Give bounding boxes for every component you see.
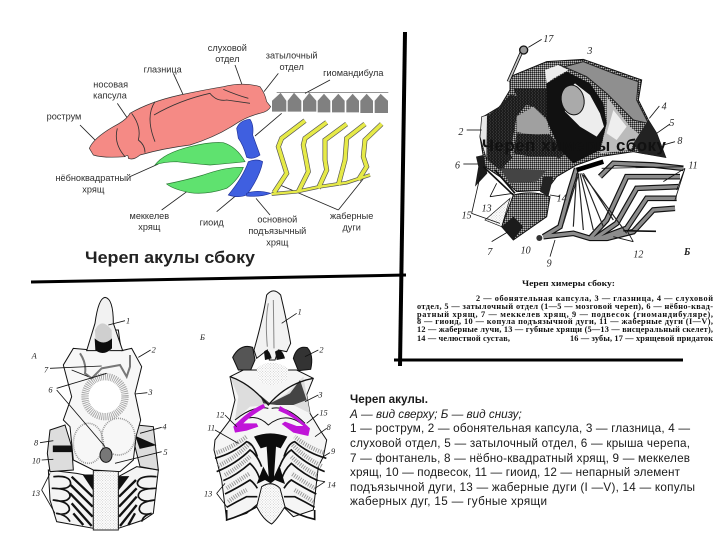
- part numbers: 3: [147, 388, 153, 397]
- part numbers: 13: [32, 489, 40, 498]
- chimera figure caption: ратный хрящ, 7 — меккелев хрящ, 9 — подвесок (гиомандибуляре),: [417, 310, 713, 319]
- anatomical labels: хрящ: [82, 184, 105, 194]
- caption: shark skull legend: жаберных дуг, 15 — губные хрящи: [350, 495, 547, 508]
- part numbers: 12: [216, 410, 224, 419]
- chimera figure caption: 8 — гиоид, 10 — копула подъязычной дуги, 11 — жаберные дуги (I—V),: [417, 317, 713, 326]
- caption: shark skull legend: 1 — рострум, 2 — обонятельная капсула, 3 — глазница, 4 —: [350, 422, 690, 435]
- leader lines: [40, 321, 162, 513]
- labial cartilage and jaw: [475, 155, 553, 240]
- part numbers: А: [31, 351, 38, 360]
- gill arches (yellow): [272, 121, 382, 194]
- heading: shark skull side: Череп акулы сбоку: [85, 248, 256, 267]
- chimera figure caption: Череп химеры сбоку:: [522, 278, 615, 288]
- spine: [93, 471, 118, 530]
- chimera figure caption: 14 — челюстной сустав,: [417, 334, 510, 343]
- part numbers: [199, 307, 336, 499]
- caption: shark skull legend: хрящ, 10 — подвесок, 11 — гиоид, 12 — непарный элемент: [350, 466, 681, 479]
- part numbers: 1: [126, 316, 130, 325]
- anatomical labels: слуховой: [208, 43, 247, 53]
- part numbers: Б: [683, 247, 691, 258]
- chimera figure caption: 12 — жаберные лучи, 13 — губные хрящи (5—13 — висцеральный скелет),: [417, 325, 713, 334]
- anatomical labels: нёбноквадратный: [55, 173, 131, 183]
- caption: shark skull legend: слуховой отдел, 5 — затылочный отдел, 6 — крыша черепа,: [350, 437, 690, 450]
- anatomical labels: капсула: [93, 91, 128, 101]
- part numbers: 11: [207, 424, 215, 433]
- part numbers: 13: [204, 490, 212, 499]
- hyomandibula (blue): [237, 119, 260, 158]
- anatomical labels: гиомандибула: [323, 68, 384, 78]
- anatomical labels: глазница: [144, 64, 183, 74]
- frontal clasper: [500, 46, 528, 107]
- part numbers: 6: [48, 386, 53, 395]
- part numbers: 11: [688, 161, 698, 172]
- anatomical labels: жаберные: [330, 211, 373, 221]
- anatomical labels: отдел: [215, 54, 239, 64]
- chimera figure caption: 2 — обонятельная капсула, 3 — глазница, 4 — слуховой: [476, 294, 713, 303]
- part numbers: 14: [327, 480, 336, 489]
- anatomical labels: носовая: [93, 79, 128, 89]
- part numbers: 15: [319, 409, 328, 418]
- palatoquadrate cartilage: [155, 142, 245, 165]
- leader lines: [80, 65, 365, 215]
- anatomical labels: меккелев: [130, 211, 169, 221]
- caption: shark skull legend: подъязычной дуги, 13 — жаберные дуги (I —V), 14 — копулы: [350, 481, 695, 494]
- caption: shark skull legend: А — вид сверху; Б — вид снизу;: [349, 408, 522, 421]
- anatomical labels: подъязычный: [248, 226, 306, 236]
- part numbers: 9: [547, 259, 552, 270]
- cranium: [480, 59, 666, 192]
- chimera figure caption: отдел, 5 — затылочный отдел (1—5 — мозговой череп), 6 — нёбно-квад-: [417, 302, 713, 311]
- caption: shark skull legend: 7 — фонтанель, 8 — нёбно-квадратный хрящ, 9 — меккелев: [350, 452, 690, 465]
- caption: shark skull legend: [349, 393, 695, 508]
- part numbers: 8: [677, 136, 682, 147]
- anatomical labels: рострум: [47, 111, 81, 121]
- rostrum: [254, 291, 291, 360]
- basihyal: [247, 191, 271, 196]
- part numbers: 2: [458, 127, 463, 138]
- part numbers: 2: [319, 345, 324, 354]
- part numbers: 15: [462, 210, 472, 221]
- cranial base: [214, 362, 327, 520]
- central basibranchial gaps: [254, 433, 287, 484]
- part numbers: 14: [557, 194, 567, 205]
- part numbers: 6: [455, 160, 460, 171]
- part numbers: 4: [662, 101, 667, 112]
- part numbers: 5: [669, 118, 674, 129]
- part numbers: 2: [152, 345, 156, 354]
- part numbers: 12: [633, 250, 643, 261]
- part numbers: [31, 316, 168, 498]
- gill arches, left and right: [48, 467, 158, 528]
- part numbers: 10: [521, 245, 531, 256]
- chimera figure caption: [417, 278, 713, 343]
- meckel cartilage: [167, 167, 243, 193]
- hyomandibula row (grey blocks): [272, 92, 388, 113]
- leader lines: [463, 39, 685, 257]
- anatomical labels: гиоид: [200, 218, 224, 228]
- part numbers: 1: [298, 307, 302, 316]
- part numbers: 4: [162, 422, 167, 431]
- chimera figure caption: 16 — зубы, 17 — хрящевой придаток: [570, 334, 713, 343]
- part numbers: 13: [482, 203, 492, 214]
- part numbers: 5: [163, 448, 168, 457]
- part numbers: 9: [331, 447, 336, 456]
- anatomical labels: [47, 43, 384, 247]
- rostrum: [87, 297, 123, 353]
- anatomical labels: хрящ: [138, 222, 161, 232]
- rostrum and cranium: [89, 84, 271, 159]
- gill arches: [215, 437, 326, 520]
- part numbers: 8: [327, 423, 332, 432]
- nasal capsules: [233, 346, 312, 371]
- leader lines: [215, 313, 330, 507]
- caption: shark skull legend: Череп акулы.: [350, 393, 428, 406]
- gill arches: [536, 162, 683, 241]
- cranium plate: [63, 330, 142, 472]
- panel: chimera skull side view: [455, 34, 698, 270]
- part numbers: 8: [34, 439, 39, 448]
- part numbers: 3: [317, 391, 323, 400]
- magenta labial cartilages: [233, 404, 310, 436]
- anatomical labels: отдел: [280, 62, 304, 72]
- otic side capsules: [47, 425, 158, 472]
- panel: shark skull bottom view (B): [199, 291, 336, 524]
- part numbers: [455, 34, 698, 270]
- anatomical labels: затылочный: [266, 51, 318, 61]
- panel: shark skull top view (A): [31, 297, 168, 530]
- anatomical labels: основной: [257, 214, 297, 224]
- panel divider lines: [31, 32, 683, 366]
- overlaid heading: chimera skull side: Череп химеры сбоку: [482, 136, 667, 155]
- panel: shark skull side view: [47, 43, 388, 247]
- part numbers: 17: [543, 34, 554, 45]
- part numbers: 7: [44, 366, 49, 375]
- part numbers: Б: [199, 333, 205, 342]
- part numbers: 3: [586, 46, 592, 57]
- hyoid (blue): [228, 160, 263, 197]
- part numbers: 7: [487, 247, 493, 258]
- anatomical labels: дуги: [342, 223, 361, 233]
- part numbers: 10: [32, 456, 41, 465]
- copula oval: [257, 484, 285, 524]
- anatomical labels: хрящ: [266, 237, 289, 247]
